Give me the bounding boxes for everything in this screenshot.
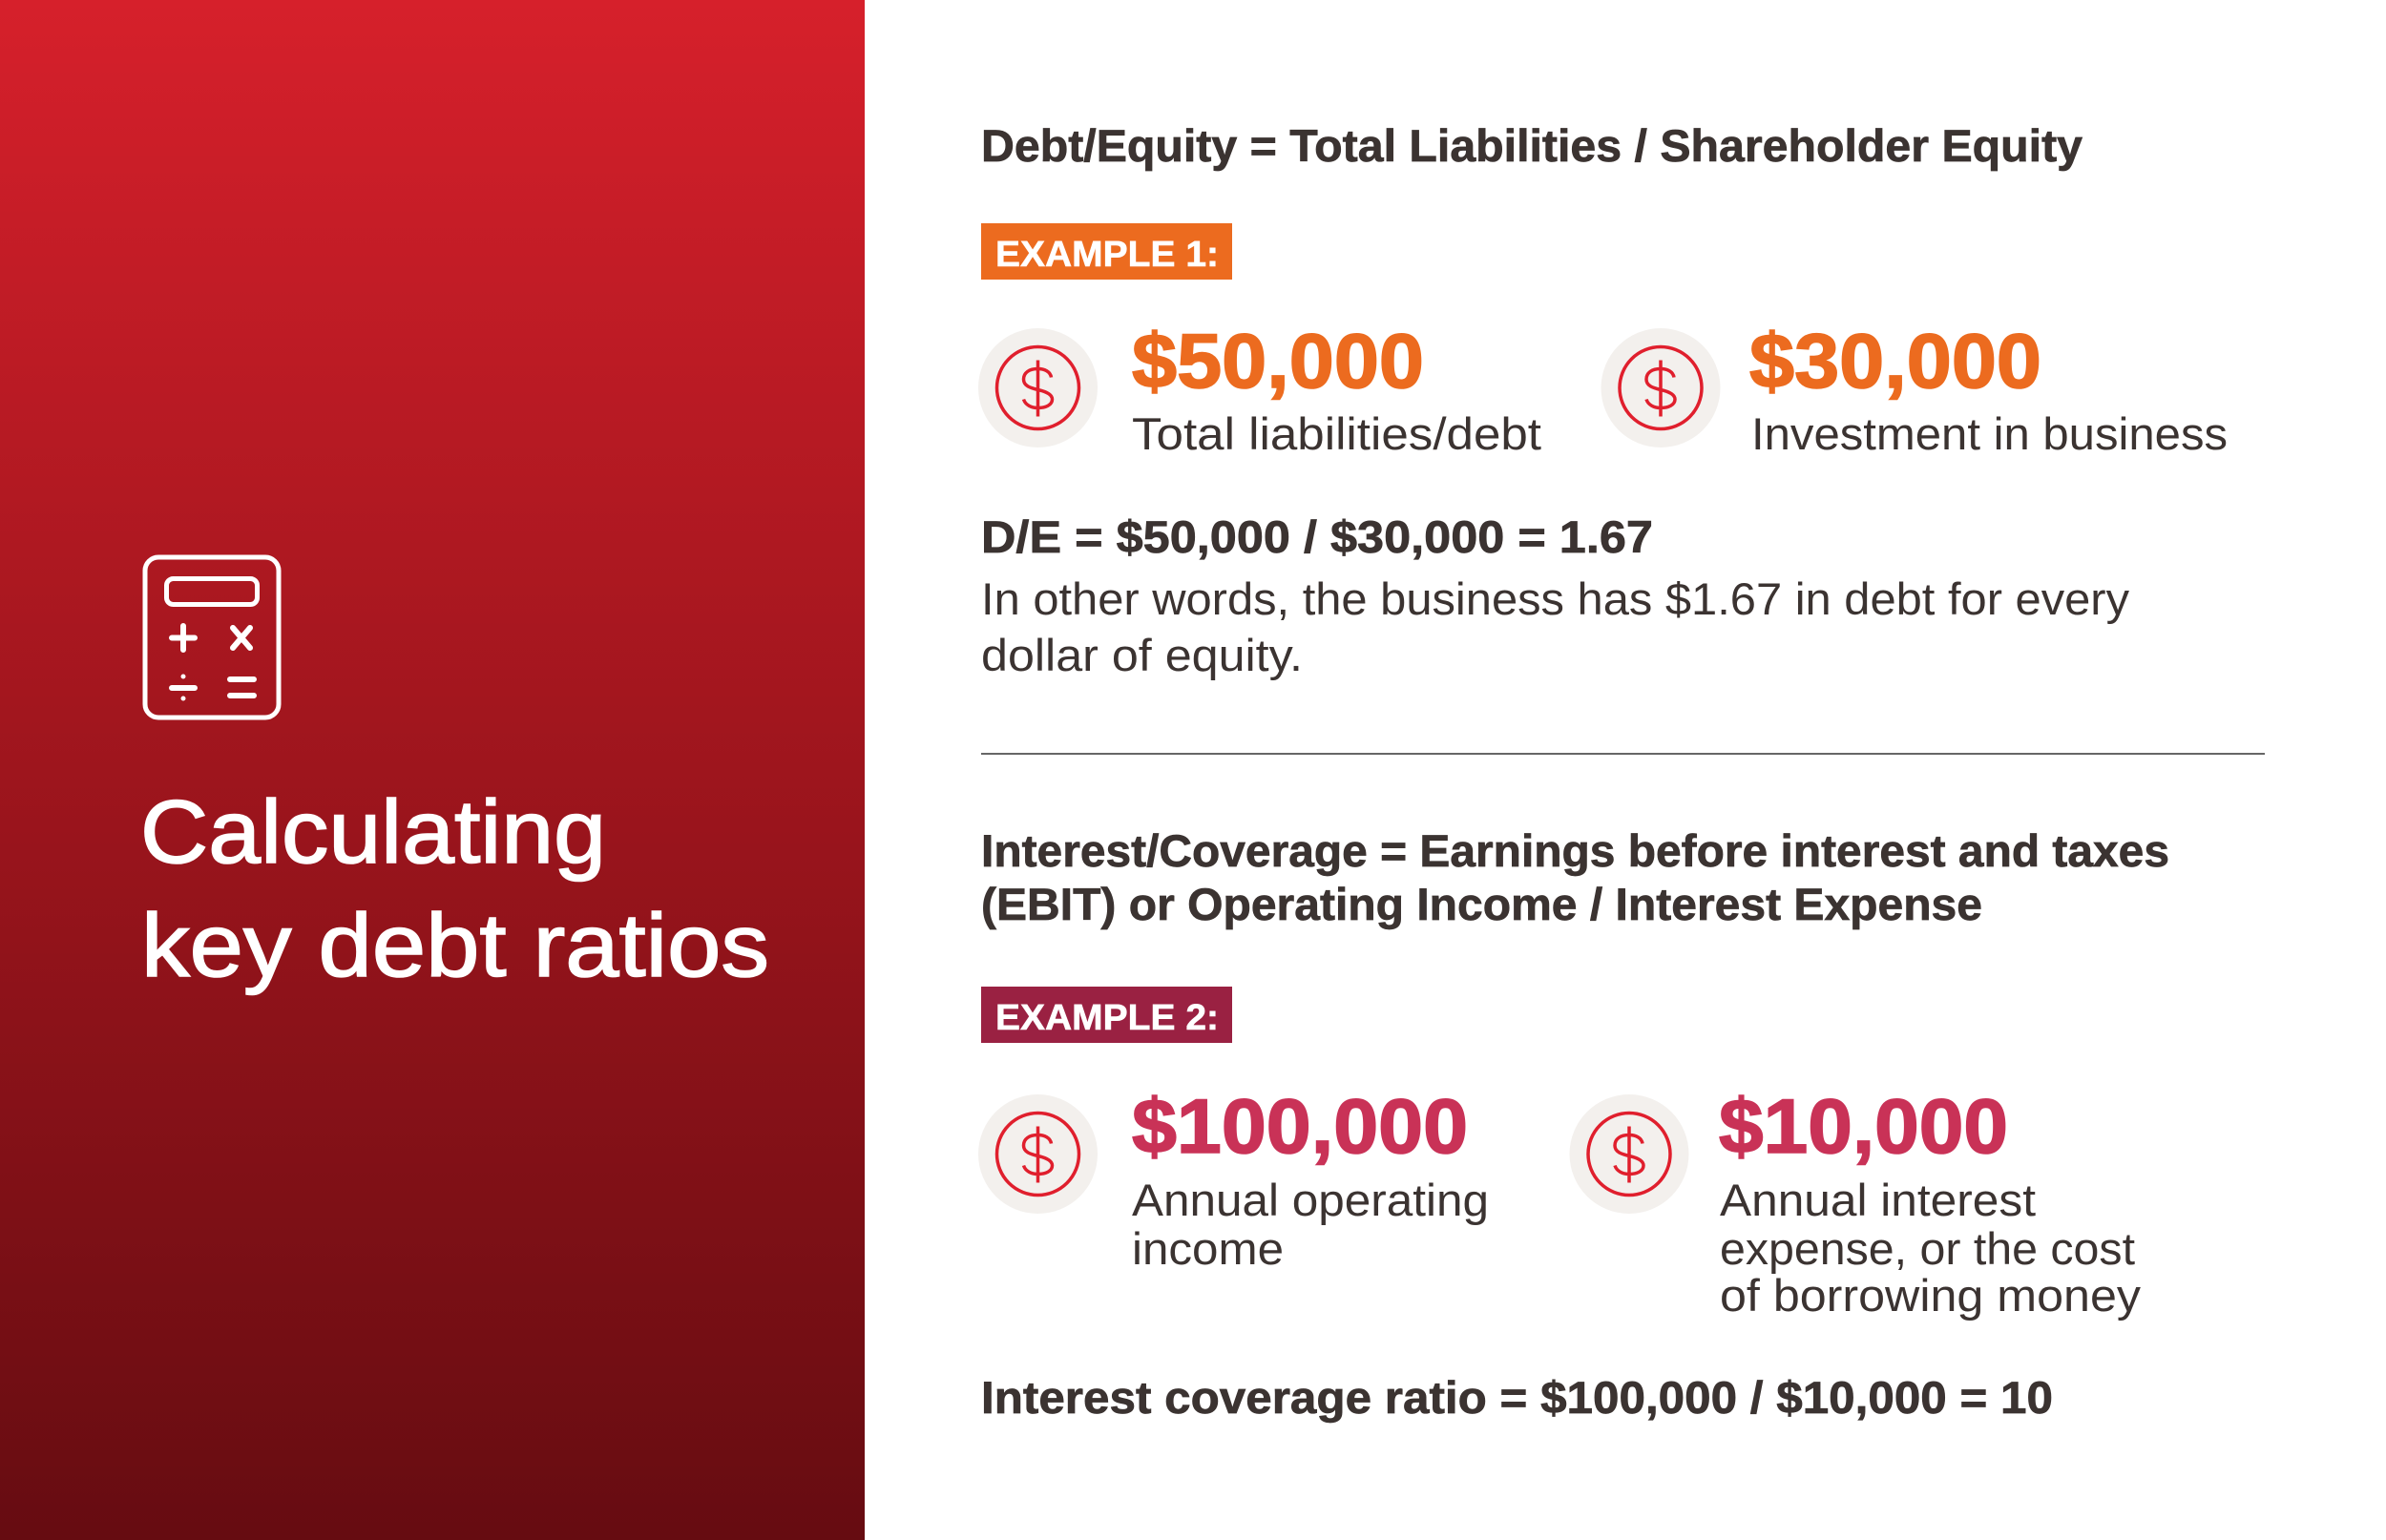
heading: debt equity formula: Debt/Equity = Total Liabilities / Shareholder Equity <box>981 120 2083 171</box>
stat: operating income: $100,000 <box>1132 1084 1468 1170</box>
title <box>140 781 769 995</box>
stat: interest expense: expense, or the cost <box>1720 1223 2135 1274</box>
badge: example 2: EXAMPLE 2: <box>995 998 1219 1038</box>
stat: investment: $30,000 <box>1749 319 2041 405</box>
stat: investment <box>1749 319 2228 459</box>
stat: total liabilities <box>1132 319 1541 459</box>
calculation: d/e: D/E = $50,000 / $30,000 = 1.67 <box>981 511 1653 562</box>
stat: operating income <box>1132 1084 1489 1274</box>
stat: interest expense: $10,000 <box>1719 1084 2008 1170</box>
explanation text <box>981 573 2130 680</box>
explanation text: In other words, the business has $1.67 in debt for every <box>981 573 2130 624</box>
calculation: interest coverage ratio: Interest coverage ratio = $100,000 / $10,000 = 10 <box>981 1372 2053 1423</box>
title: key debt ratios <box>141 895 769 995</box>
panel: red gradient sidebar <box>0 0 865 1540</box>
icon: dollar coin <box>978 1094 1098 1214</box>
heading: interest coverage formula <box>981 825 2169 929</box>
icon: dollar coin <box>1601 328 1720 447</box>
stat: investment: Investment in business <box>1751 408 2228 459</box>
panel: interest coverage <box>978 825 2169 1423</box>
stat: interest expense: Annual interest <box>1720 1175 2036 1225</box>
title: Calculating <box>140 781 606 882</box>
panel: debt to equity <box>978 120 2228 680</box>
icon: calculator <box>145 557 279 718</box>
stat: operating income: Annual operating <box>1132 1175 1489 1225</box>
badge: example 2 <box>981 987 1232 1043</box>
heading: interest coverage formula: Interest/Coverage = Earnings before interest and taxes <box>981 825 2169 876</box>
badge: example 1 <box>981 223 1232 280</box>
heading: interest coverage formula: (EBIT) or Operating Income / Interest Expense <box>981 879 1982 929</box>
badge: example 1: EXAMPLE 1: <box>995 235 1219 275</box>
icon: dollar coin <box>1569 1094 1689 1214</box>
explanation text: dollar of equity. <box>981 630 1303 680</box>
stat: interest expense: of borrowing money <box>1720 1270 2142 1321</box>
stat: operating income: income <box>1132 1223 1284 1274</box>
stat: total liabilities: $50,000 <box>1132 319 1424 405</box>
icon: dollar coin <box>978 328 1098 447</box>
stat: interest expense <box>1719 1084 2142 1321</box>
stat: total liabilities: Total liabilities/debt <box>1132 408 1541 459</box>
